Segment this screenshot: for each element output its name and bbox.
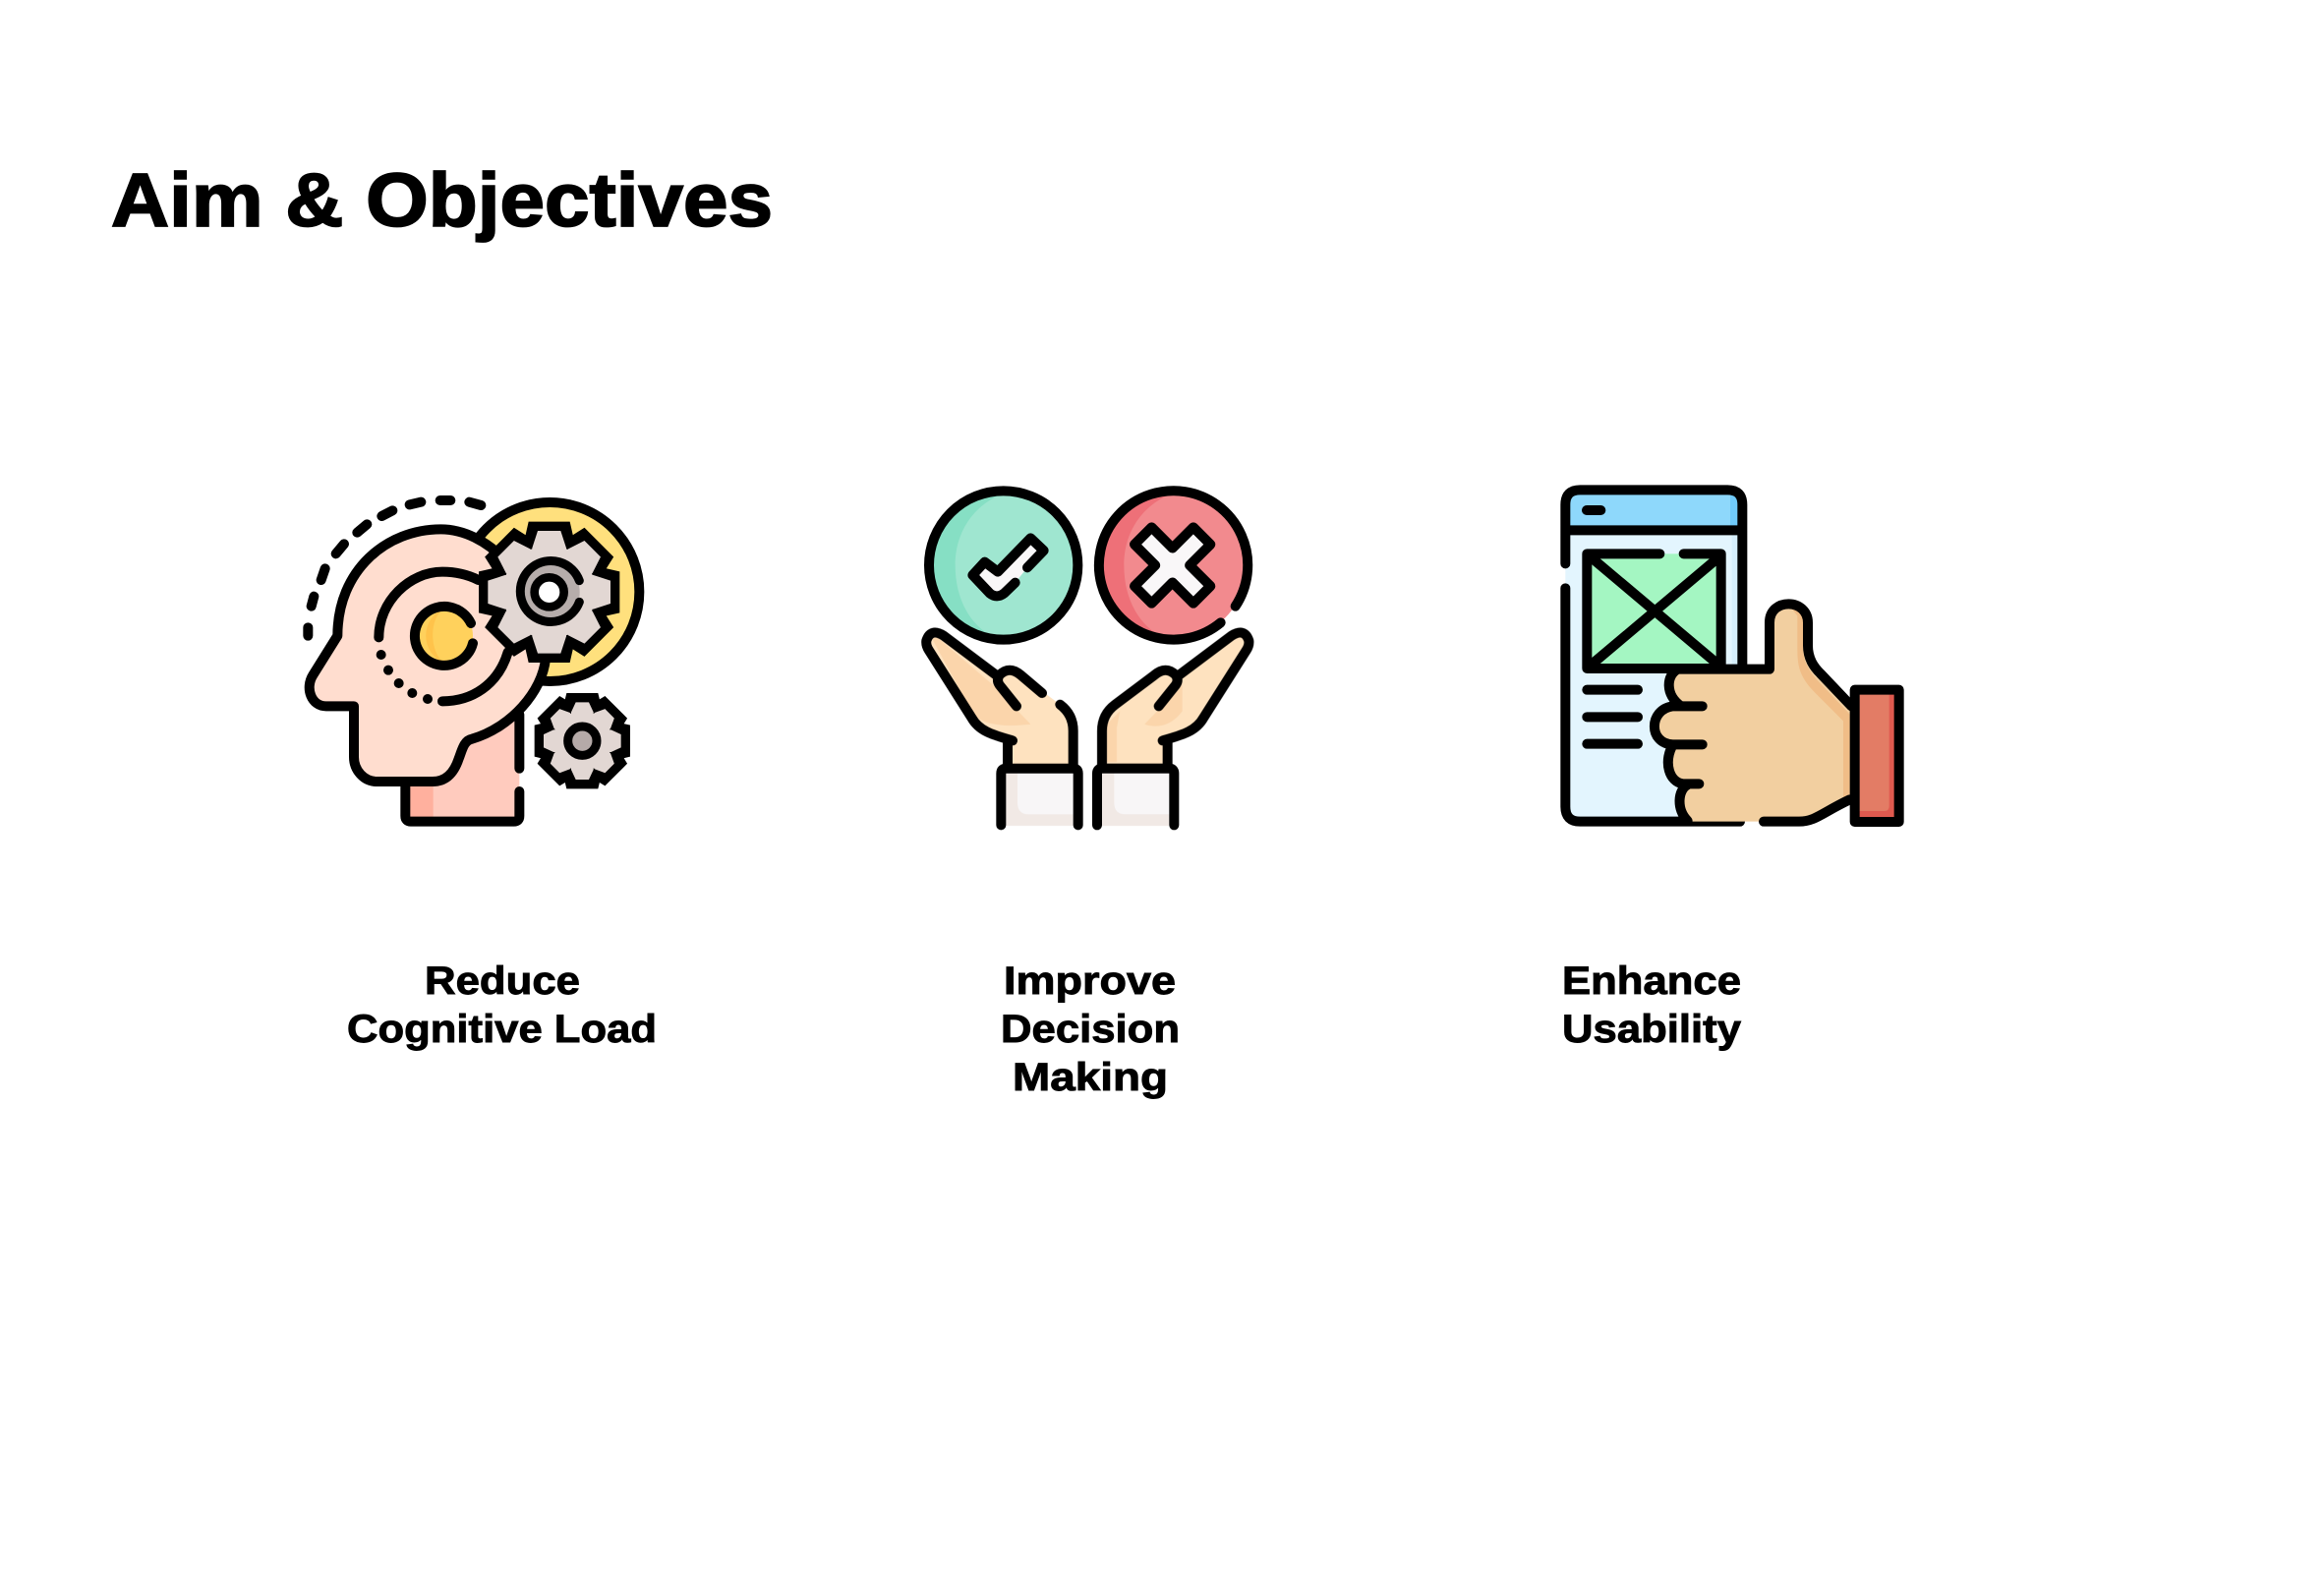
title: Aim & Objectives bbox=[111, 158, 773, 243]
check circle bbox=[929, 491, 1077, 640]
icon: hands with check and cross bbox=[926, 491, 1249, 826]
head silhouette bbox=[310, 529, 546, 782]
label: reduce cognitive load bbox=[347, 959, 657, 1051]
label: improve decision making: Decision bbox=[1001, 1008, 1180, 1051]
label: enhance usability: Enhance bbox=[1562, 959, 1741, 1003]
small gear bbox=[535, 693, 630, 788]
sleeve bbox=[1855, 690, 1899, 822]
right hand bbox=[1102, 632, 1249, 767]
left cuff bbox=[1001, 769, 1078, 826]
icon: thumbs up and mobile wireframe bbox=[1565, 490, 1899, 822]
label: improve decision making bbox=[1001, 959, 1180, 1099]
label: reduce cognitive load: Cognitive Load bbox=[347, 1008, 657, 1051]
label: reduce cognitive load: Reduce bbox=[425, 959, 580, 1003]
label: enhance usability: Usability bbox=[1562, 1008, 1741, 1051]
text lines bbox=[1587, 690, 1638, 744]
thumbs up hand bbox=[1655, 604, 1855, 822]
inner arcs and dots bbox=[378, 572, 508, 701]
neck bbox=[405, 715, 519, 822]
cross circle bbox=[1098, 491, 1248, 640]
icon: head with gears bbox=[308, 500, 639, 822]
yellow centre circle bbox=[414, 607, 473, 666]
image placeholder bbox=[1587, 553, 1721, 668]
label: enhance usability bbox=[1562, 959, 1741, 1051]
left hand bbox=[926, 632, 1074, 767]
dashed thought arc bbox=[308, 500, 481, 636]
label: improve decision making: Improve bbox=[1004, 959, 1176, 1003]
phone body bbox=[1565, 490, 1742, 822]
right cuff bbox=[1097, 769, 1174, 826]
large gear bbox=[479, 522, 619, 663]
label: improve decision making: Making bbox=[1013, 1056, 1168, 1099]
